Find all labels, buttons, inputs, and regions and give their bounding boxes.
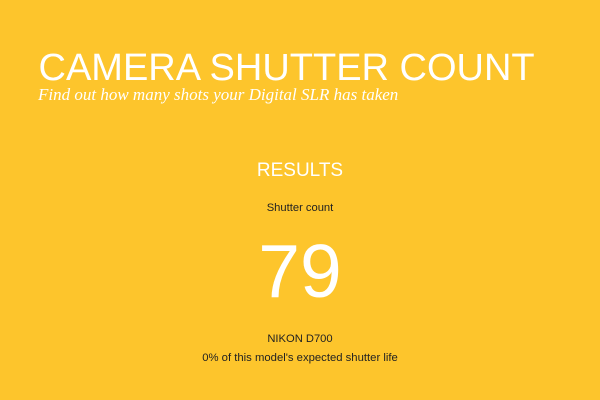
camera model: NIKON D700 [267,333,333,345]
shutter count label: Shutter count [267,202,333,214]
shutter life percentage: 0% of this model's expected shutter life [202,352,398,364]
subtitle: Find out how many shots your Digital SLR has taken [38,85,398,104]
title: CAMERA SHUTTER COUNT [38,47,535,89]
results heading: RESULTS [257,160,343,181]
shutter count value: 79 [258,229,342,313]
